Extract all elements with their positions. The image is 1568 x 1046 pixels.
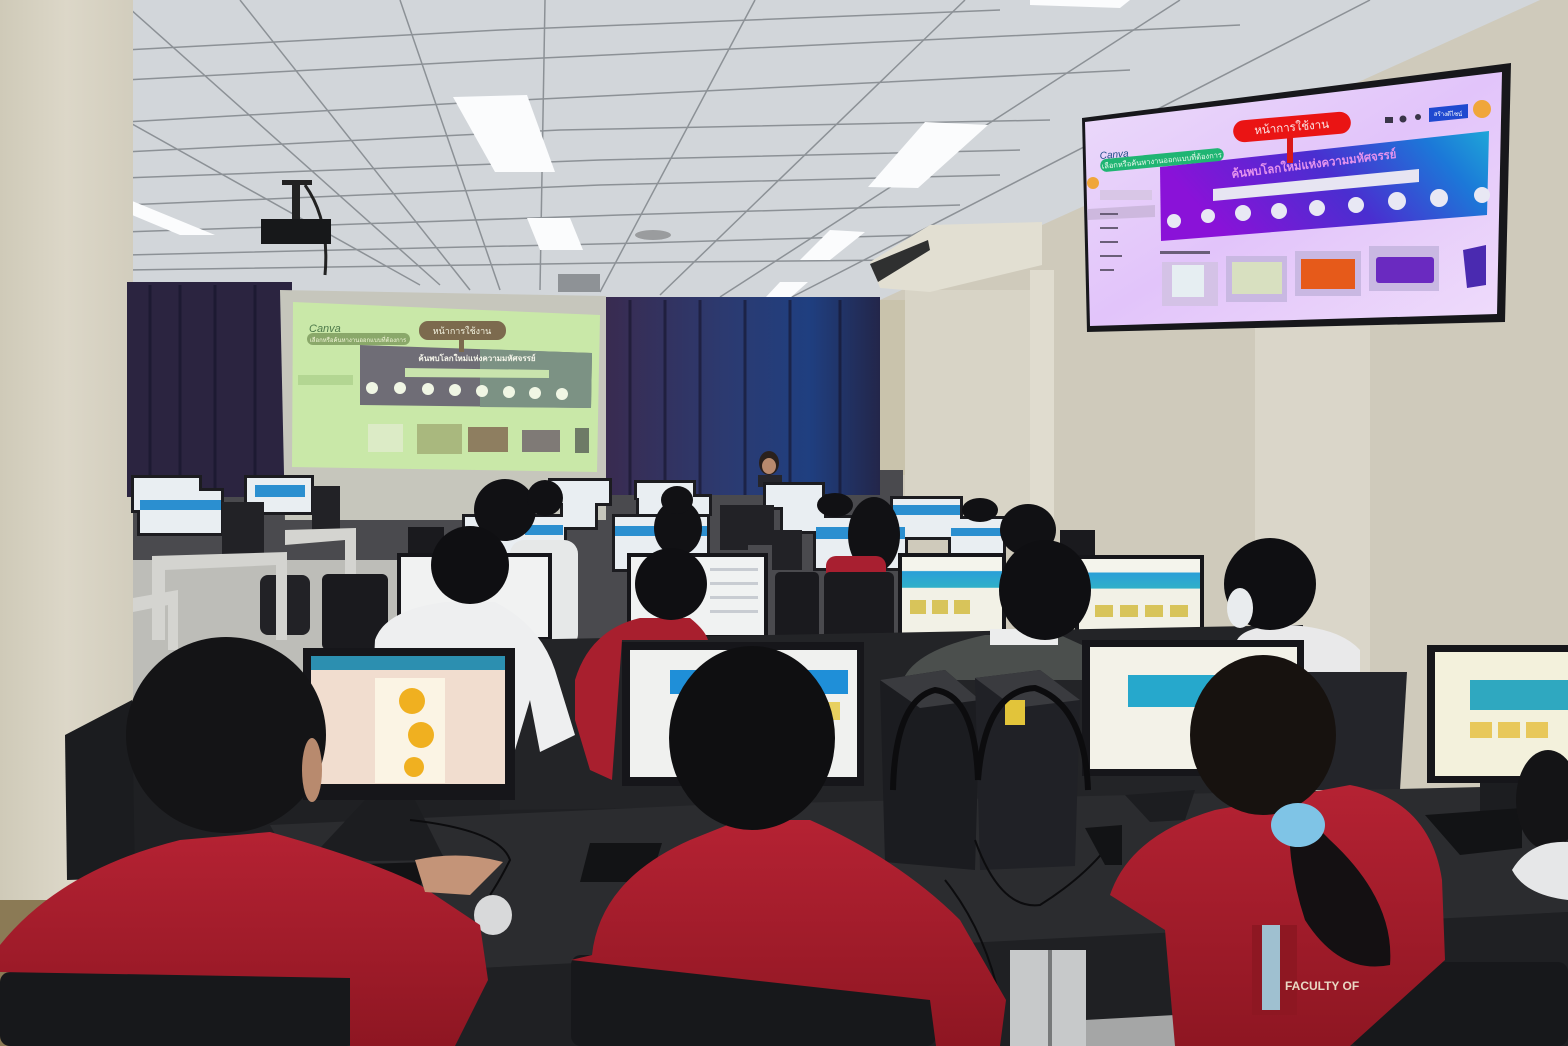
student red shirt bbox=[575, 548, 708, 780]
projected pill label: หน้าการใช้งาน bbox=[433, 326, 491, 336]
sidebar bbox=[1088, 190, 1210, 271]
keyboards and mouse bbox=[305, 808, 1522, 935]
monitor far right bbox=[1427, 645, 1568, 811]
template cards bbox=[1162, 245, 1486, 306]
chairs bbox=[0, 955, 1568, 1046]
middle row students bbox=[372, 526, 1360, 800]
create button: สร้างดีไซน์ bbox=[1434, 110, 1462, 118]
faculty logo: FACULTY OF bbox=[1285, 979, 1359, 993]
front row monitors bbox=[303, 640, 1568, 862]
back row computers bbox=[131, 475, 1006, 650]
canva logo: Canva bbox=[1099, 148, 1129, 162]
wall television bbox=[1082, 63, 1511, 332]
user avatar bbox=[1473, 100, 1491, 118]
header icons bbox=[1385, 114, 1421, 123]
monitor centre bbox=[622, 642, 864, 786]
middle towers bbox=[322, 527, 1095, 650]
projected pill label bbox=[419, 321, 506, 340]
student grey vest bbox=[903, 540, 1091, 680]
student white shirt bbox=[372, 526, 575, 800]
back row students bbox=[474, 479, 1056, 648]
banner headline: ค้นพบโลกใหม่แห่งความมหัศจรรย์ bbox=[1231, 146, 1397, 181]
red callout: หน้าการใช้งาน bbox=[1254, 118, 1330, 137]
projected headline: ค้นพบโลกใหม่แห่งความมหัศจรรย์ bbox=[418, 353, 536, 363]
projector bbox=[261, 180, 331, 275]
curtains bbox=[127, 282, 880, 497]
front student right with ponytail bbox=[1110, 655, 1445, 1046]
projection screen: Canva bbox=[309, 323, 341, 335]
monitor left with sunflower bbox=[303, 648, 515, 862]
mesh chair bbox=[1303, 672, 1407, 790]
middle row desk bbox=[500, 625, 1303, 810]
cables bbox=[410, 820, 1105, 1000]
student with mask bbox=[1224, 538, 1360, 672]
front row desk bbox=[270, 785, 1568, 968]
middle row monitors bbox=[397, 553, 1204, 641]
front student centre bbox=[571, 646, 1006, 1046]
monitor right bbox=[1082, 640, 1304, 822]
projection screen bbox=[280, 290, 606, 520]
ceiling lights bbox=[125, 0, 1130, 298]
ceiling bbox=[0, 0, 1568, 310]
search bar bbox=[1213, 169, 1419, 201]
projected green label bbox=[307, 333, 410, 345]
red callout bbox=[1232, 111, 1352, 163]
instructor bbox=[758, 451, 782, 487]
banner category icons bbox=[1167, 187, 1490, 228]
far right student bbox=[1512, 750, 1568, 900]
projected green label: เลือกหรือค้นหางานออกแบบที่ต้องการ bbox=[310, 336, 407, 344]
faculty logo bbox=[1252, 925, 1359, 1015]
computer towers bbox=[65, 670, 1088, 880]
right wall bbox=[880, 0, 1568, 800]
air conditioner bbox=[870, 222, 1042, 292]
back of room bbox=[133, 470, 903, 730]
green callout: เลือกหรือค้นหางานออกแบบที่ต้องการ bbox=[1101, 149, 1222, 171]
front student left bbox=[0, 637, 503, 1046]
create button bbox=[1429, 104, 1468, 122]
left pillar bbox=[0, 0, 133, 900]
banner bbox=[1160, 131, 1489, 241]
